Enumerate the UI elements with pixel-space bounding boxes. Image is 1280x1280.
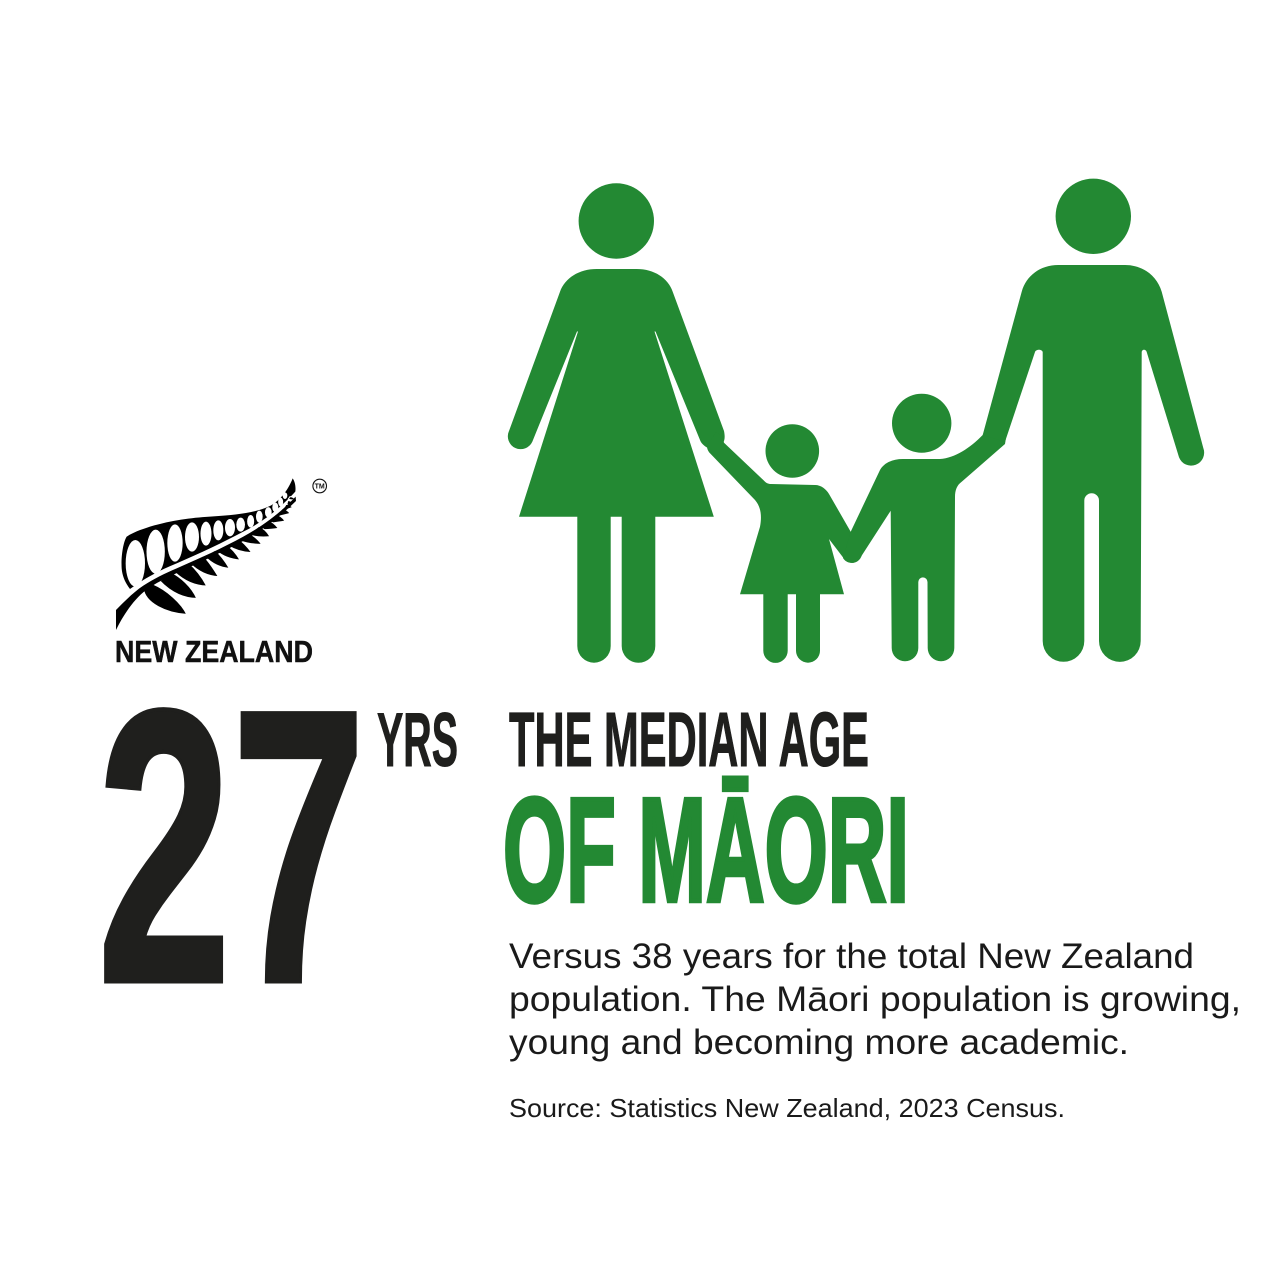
figure: girl bbox=[707, 424, 862, 663]
icon: trademark symbol bbox=[313, 479, 327, 493]
big number: 27: 27 bbox=[97, 628, 366, 1064]
icon: silver fern bbox=[116, 478, 296, 630]
body text bbox=[509, 937, 1241, 1062]
body text: Versus 38 years for the total New Zealand bbox=[509, 937, 1194, 976]
unit: YRS: YRS bbox=[377, 698, 458, 783]
heading: the median age: THE MEDIAN AGE bbox=[509, 697, 869, 783]
logo: New Zealand fern mark bbox=[115, 478, 327, 669]
family illustration bbox=[508, 179, 1204, 663]
icon: trademark symbol: TM bbox=[315, 484, 325, 490]
source note: Source: Statistics New Zealand, 2023 Census. bbox=[509, 1093, 1065, 1123]
figure: woman bbox=[508, 183, 725, 663]
body text: young and becoming more academic. bbox=[509, 1023, 1129, 1062]
heading: of Māori: OF MĀORI bbox=[503, 768, 909, 933]
figure: man bbox=[983, 179, 1204, 662]
body text: population. The Māori population is growing, bbox=[509, 980, 1241, 1019]
figure: boy bbox=[843, 394, 1008, 661]
logo wordmark: NEW ZEALAND bbox=[115, 634, 313, 669]
